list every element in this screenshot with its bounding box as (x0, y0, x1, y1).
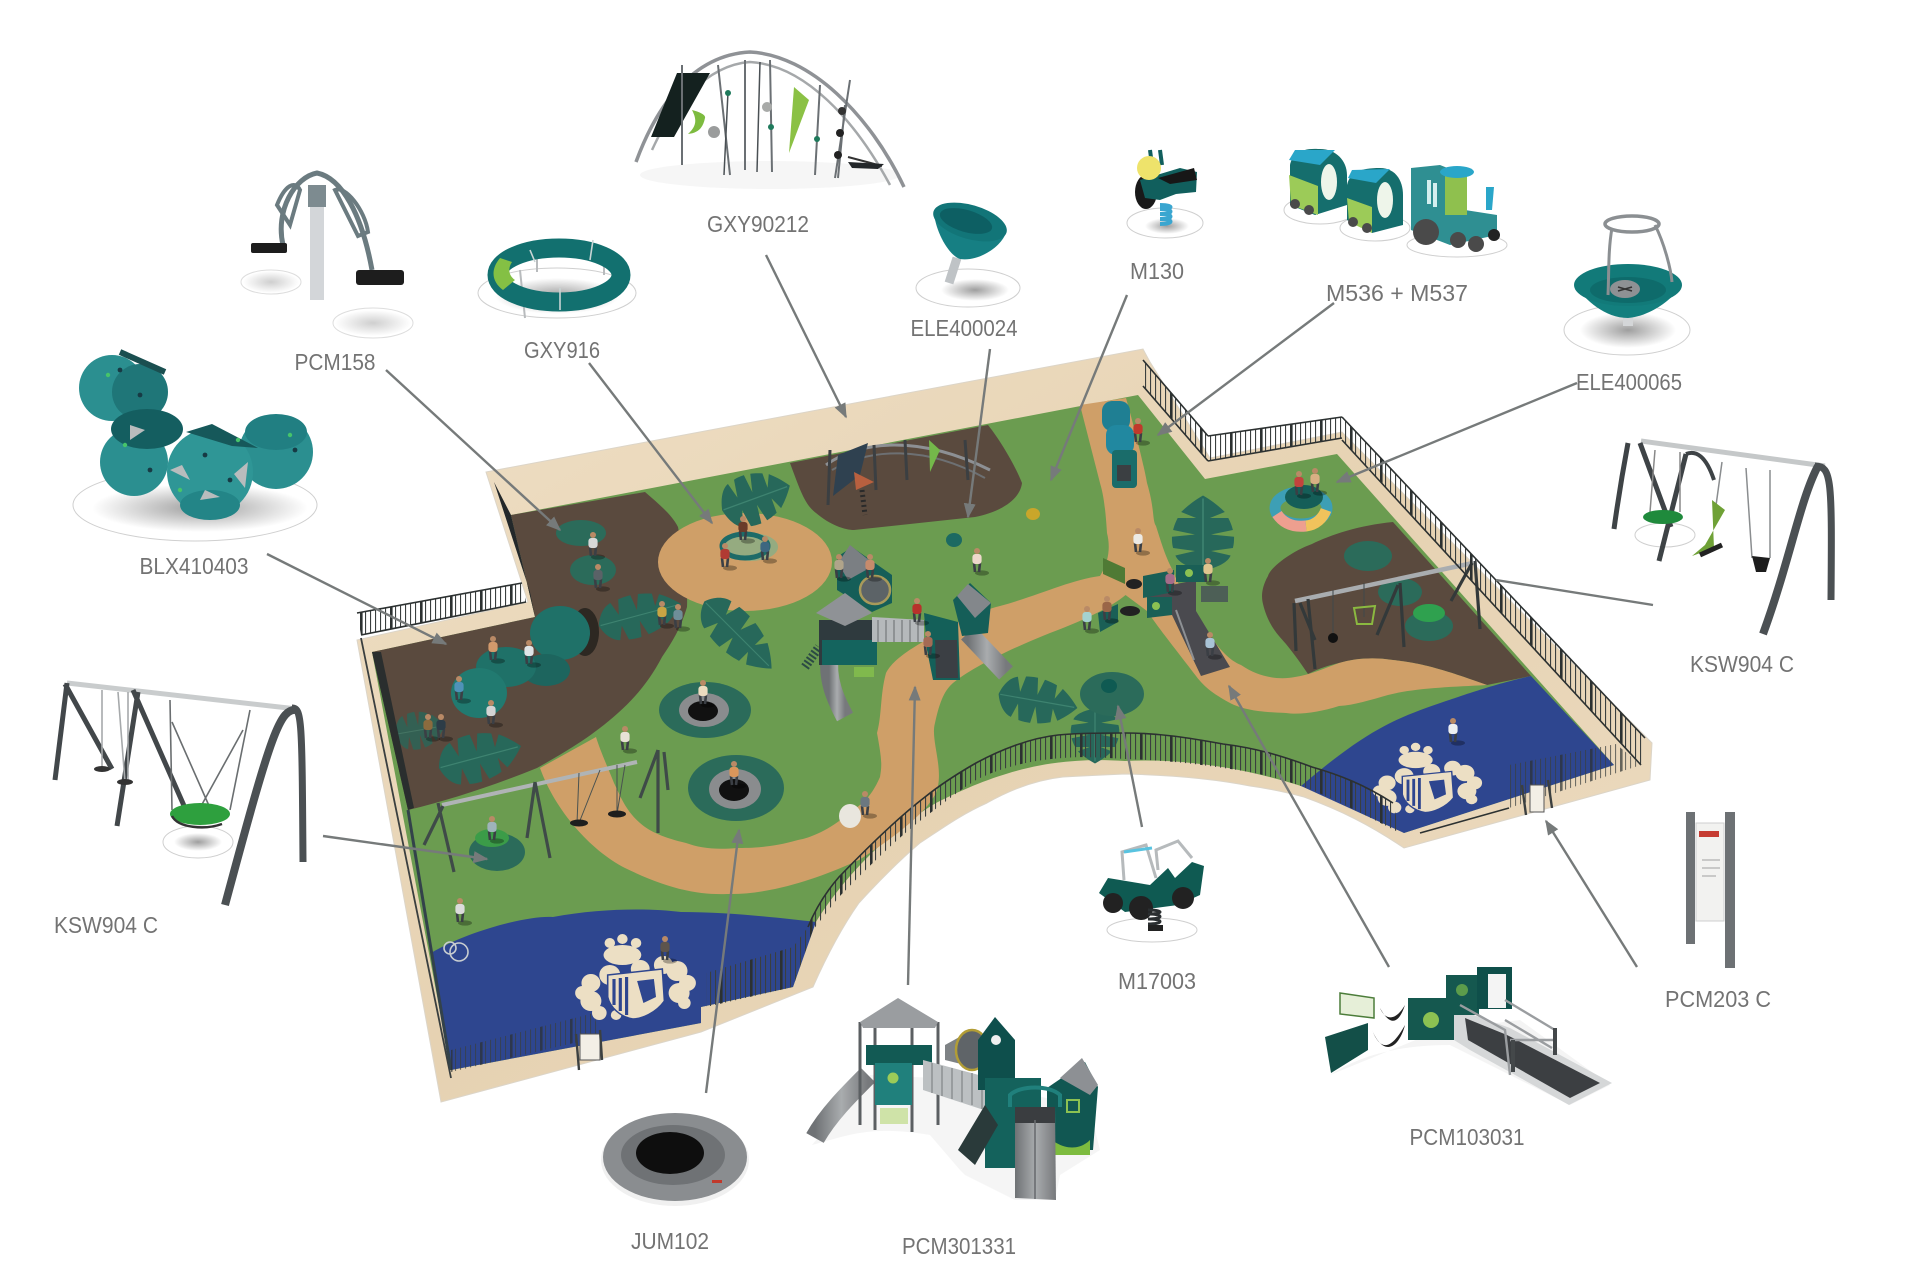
ground: green rubber surface (372, 395, 1614, 1070)
safety discs (469, 520, 1453, 871)
brown area: left (372, 492, 687, 810)
arrow: M536 + M537 (1158, 303, 1334, 435)
sand path: north and east branch (1080, 398, 1487, 714)
icon: climbing arch (636, 52, 904, 189)
product: ELE400065 spinning bowl (1564, 216, 1690, 395)
arrow: KSW904 C right (1496, 580, 1653, 605)
product: KSW904 C swing right (1614, 441, 1831, 677)
arrow: ELE400065 (1337, 383, 1577, 482)
icon: information sign (1686, 812, 1735, 968)
perimeter wall (357, 349, 1652, 1102)
park plan (357, 349, 1652, 1102)
small equipment: bike and buggy in park (946, 508, 1117, 693)
sign on wall left (576, 1030, 602, 1070)
climbing arch in park (826, 440, 990, 515)
icon: ring seat (478, 240, 636, 318)
train in park (1102, 401, 1137, 488)
product: PCM301331 play structure (812, 998, 1100, 1259)
product: ELE400024 spinning cup (910, 195, 1020, 341)
sand path: south loop (540, 576, 1129, 894)
label: JUM102 (631, 1228, 709, 1254)
product: M536 + M537 train (1284, 149, 1507, 306)
crest right (1373, 743, 1482, 813)
product: PCM203 C sign (1665, 812, 1771, 1012)
product: BLX410403 climbing domes (73, 352, 317, 579)
arrow: GXY90212 (766, 255, 846, 417)
product: KSW904 C swing left (54, 683, 303, 938)
icon: play structure (812, 998, 1100, 1200)
arrow: PCM158 (386, 370, 560, 530)
product: JUM102 trampoline (601, 1113, 749, 1254)
arrow: BLX410403 (267, 554, 446, 644)
label: PCM203 C (1665, 986, 1771, 1012)
icon: trampoline (601, 1113, 749, 1206)
brown area: top (790, 425, 1022, 530)
right swing in park (1294, 561, 1480, 669)
product: GXY916 ring (478, 240, 636, 363)
icon: spinning cup (916, 195, 1020, 307)
sand circle (658, 513, 832, 611)
label: KSW904 C (1690, 651, 1794, 677)
product: M130 spring rider (1127, 150, 1203, 284)
product: PCM158 see-saw (241, 173, 413, 375)
arrow: M130 (1051, 295, 1127, 480)
icon: motorcycle spring rider (1127, 150, 1203, 238)
product: PCM103031 inclusive structure (1325, 967, 1612, 1150)
play structure in park (805, 545, 1006, 717)
icon: see-saw (241, 173, 413, 338)
product: M17003 buggy (1099, 841, 1204, 994)
crest left (575, 934, 696, 1020)
arrow: KSW904 C left (323, 836, 487, 859)
blue surface right (1301, 676, 1614, 833)
label: M536 + M537 (1326, 280, 1468, 306)
rotating seat in park (1285, 485, 1323, 509)
arrow: GXY916 (589, 363, 712, 523)
label: KSW904 C (54, 912, 158, 938)
GXY916 ring in park (722, 533, 778, 561)
label: PCM301331 (902, 1233, 1016, 1259)
label: ELE400065 (1576, 369, 1682, 395)
label: BLX410403 (140, 553, 248, 579)
fences (357, 360, 1645, 1078)
visitors (423, 418, 1465, 964)
left swing in park (424, 750, 668, 872)
product: GXY90212 climbing arch (636, 52, 904, 237)
stroller (839, 804, 861, 828)
label: M130 (1130, 258, 1184, 284)
label: M17003 (1118, 968, 1196, 994)
icon: ramp and panels (1325, 967, 1612, 1105)
label: GXY916 (524, 337, 600, 363)
icon: swing set left (55, 683, 303, 905)
blue surface left (431, 909, 816, 1070)
label: PCM103031 (1410, 1124, 1524, 1150)
arrow: ELE400024 (968, 349, 990, 517)
wheelchair (444, 942, 468, 961)
rainbow ring (1275, 492, 1327, 526)
sign on wall right (1522, 780, 1552, 815)
train engine (1411, 165, 1500, 252)
arrow: PCM103031 (1229, 686, 1389, 967)
icon: buggy spring rider (1099, 841, 1204, 942)
icon: train (1284, 149, 1507, 257)
arrows from labels to park (267, 255, 1653, 1093)
arrow: PCM203 C (1546, 821, 1637, 967)
icon: swing set right (1614, 441, 1831, 634)
leaf decals (392, 462, 1234, 791)
trampoline on ground 2 (688, 755, 784, 821)
label: GXY90212 (707, 211, 809, 237)
train car 2 (1347, 168, 1403, 233)
icon: spinning bowl (1564, 216, 1690, 355)
inclusive structure in park (1098, 558, 1230, 676)
arrow: JUM102 (706, 830, 739, 1093)
arrow: M17003 (1118, 706, 1142, 827)
icon: climbing domes (73, 352, 317, 541)
label: PCM158 (294, 349, 376, 375)
trampoline on ground 1 (659, 682, 751, 738)
climbing spheres in park (451, 606, 599, 718)
arrow: PCM301331 (908, 687, 915, 985)
train car 1 (1289, 149, 1347, 215)
label: ELE400024 (910, 315, 1018, 341)
brown area: right (1262, 522, 1531, 685)
